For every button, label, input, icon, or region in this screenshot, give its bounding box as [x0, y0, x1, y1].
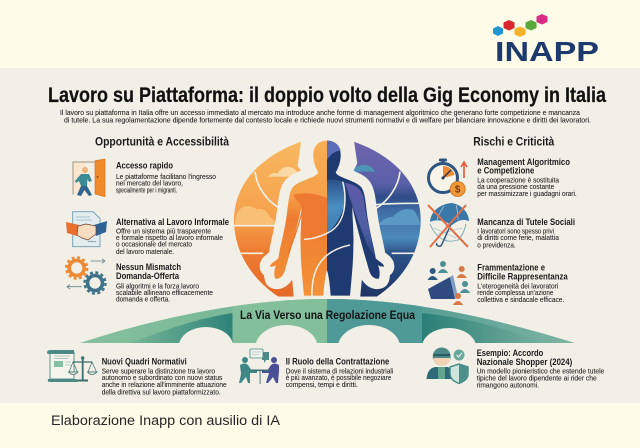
text: mismatch	[116, 262, 213, 304]
text: tutele: di diritti come ferie, malattia	[477, 233, 560, 242]
text: mismatch: Domanda-Offerta	[116, 271, 179, 281]
text: frammentazione: collettiva e sindacale efficace.	[477, 295, 564, 304]
text: contrattazione: è più avanzato, è possibile negoziare	[286, 373, 391, 382]
text: accesso rapido: Accesso rapido	[116, 160, 174, 170]
heading: risks: Rischi e Criticità	[473, 134, 555, 148]
text: contrattazione: compensi, tempi e diritti.	[286, 380, 358, 389]
logo: INAPP	[493, 14, 599, 67]
icon: gears and arrows	[66, 258, 106, 294]
text: management: per massimizzare i guadagni orari.	[477, 189, 577, 198]
text: esempio: tipiche del lavoro dipendente ai rider che	[477, 374, 597, 383]
icon: handshake on document	[66, 212, 107, 247]
central figure: split human silhouette in a sphere	[234, 140, 421, 297]
text: esempio: rimangono autonomi.	[477, 381, 539, 390]
text: contrattazione	[286, 356, 394, 389]
right half of sphere	[327, 142, 421, 297]
icon: open door with person	[73, 159, 105, 197]
text: alternativa: Offre un sistema più trasparente	[116, 226, 211, 235]
intro text	[60, 108, 591, 124]
text: management: Management Algoritmico	[477, 157, 571, 167]
icon: umbrella crossed out	[428, 203, 469, 247]
text: management: e Competizione	[477, 166, 534, 176]
text: quadri normativi: della direttiva sul lavoro piattaformizzato.	[102, 387, 221, 396]
figure: blue half	[327, 141, 384, 296]
text: contrattazione: Dove il sistema di relazioni industriali	[286, 366, 394, 375]
left half of sphere	[234, 142, 327, 297]
intro text: di tutele. La sua regolamentazione dipende fortemente dal contesto locale e richiede nuovi strumenti normativi e di welfare per bilanciare innovazione e diritti dei lavoratori.	[64, 116, 591, 124]
logo: INAPP: INAPP	[495, 36, 599, 67]
panel: infographic body	[0, 68, 640, 403]
text: alternativa: e formale rispetto al lavoro informale	[116, 233, 223, 242]
text: esempio	[477, 348, 604, 390]
clouds	[235, 165, 420, 225]
text: esempio: Esempio: Accordo	[477, 348, 544, 358]
text: management	[477, 157, 577, 198]
text: frammentazione: Frammentazione e	[477, 263, 545, 273]
text: mismatch: scalabile allineano efficacemente	[116, 288, 213, 297]
text: accesso rapido	[116, 160, 216, 194]
text: accesso rapido: nel mercato del lavoro,	[116, 179, 183, 188]
text: accesso rapido: Le piattaforme facilitano l'ingresso	[116, 172, 216, 181]
text: mismatch: Gli algoritmi e la forza lavoro	[116, 281, 199, 290]
footer credit: Elaborazione Inapp con ausilio di IA	[51, 413, 280, 428]
figure: orange half	[270, 141, 327, 296]
text: mismatch: Nessun Mismatch	[116, 262, 181, 272]
text: frammentazione: L'eterogeneità dei lavoratori	[477, 281, 559, 290]
heading: opportunities: Opportunità e Accessibilità	[95, 134, 229, 148]
text: quadri normativi: anche in relazione all'imminente attuazione	[102, 380, 227, 389]
text: tutele: Mancanza di Tutele Sociali	[477, 217, 575, 227]
text: management: da una pressione costante	[477, 182, 554, 191]
text: esempio: Un modello pionieristico che estende tutele	[477, 367, 604, 376]
text: alternativa	[116, 217, 229, 256]
text: quadri normativi	[102, 356, 227, 396]
text: alternativa: del lavoro materiale.	[116, 247, 174, 256]
icon: rider with shield	[426, 348, 468, 384]
sphere divider lines	[234, 172, 421, 253]
text: esempio: Nazionale Shopper (2024)	[477, 357, 572, 367]
text: frammentazione: rende complessa un'azione	[477, 288, 553, 297]
figure details	[288, 141, 376, 296]
text: quadri normativi: autonomo e subordinato con nuovi status	[102, 373, 223, 382]
text: accesso rapido: specialmente per i migranti.	[116, 185, 177, 194]
text: mismatch: domanda e offerta.	[116, 295, 170, 304]
text: frammentazione	[477, 263, 568, 304]
text: alternativa: Alternativa al Lavoro Informale	[116, 217, 229, 227]
text: quadri normativi: Nuovi Quadri Normativi	[102, 356, 187, 366]
intro text: Il lavoro su piattaforma in Italia offre un accesso immediato al mercato ma introduce anche forme di management algoritmico che generano forte competizione e mancanza	[60, 108, 581, 117]
halo around the figure	[260, 142, 394, 297]
icon: stopwatch with coin	[428, 158, 467, 196]
icon: negotiation meeting	[239, 349, 279, 384]
text: tutele	[477, 217, 575, 249]
text: frammentazione: Difficile Rappresentanza	[477, 271, 568, 281]
text: quadri normativi: Serve superare la distinzione tra lavoro	[102, 366, 215, 375]
text: management: La cooperazione è sostituita	[477, 175, 560, 184]
text: contrattazione: Il Ruolo della Contrattazione	[286, 356, 389, 366]
icon: megaphone with people	[428, 261, 470, 305]
text: alternativa: o occasionale del mercato	[116, 240, 192, 249]
bridge arch	[80, 299, 575, 343]
heading: regulation: La Via Verso una Regolazione Equa	[240, 308, 415, 322]
text: tutele: I lavoratori sono spesso privi	[477, 226, 554, 235]
text: tutele: o previdenza.	[477, 240, 516, 249]
icon: scroll and scales	[47, 350, 97, 382]
icon: stopwatch with coin: $	[455, 184, 461, 196]
